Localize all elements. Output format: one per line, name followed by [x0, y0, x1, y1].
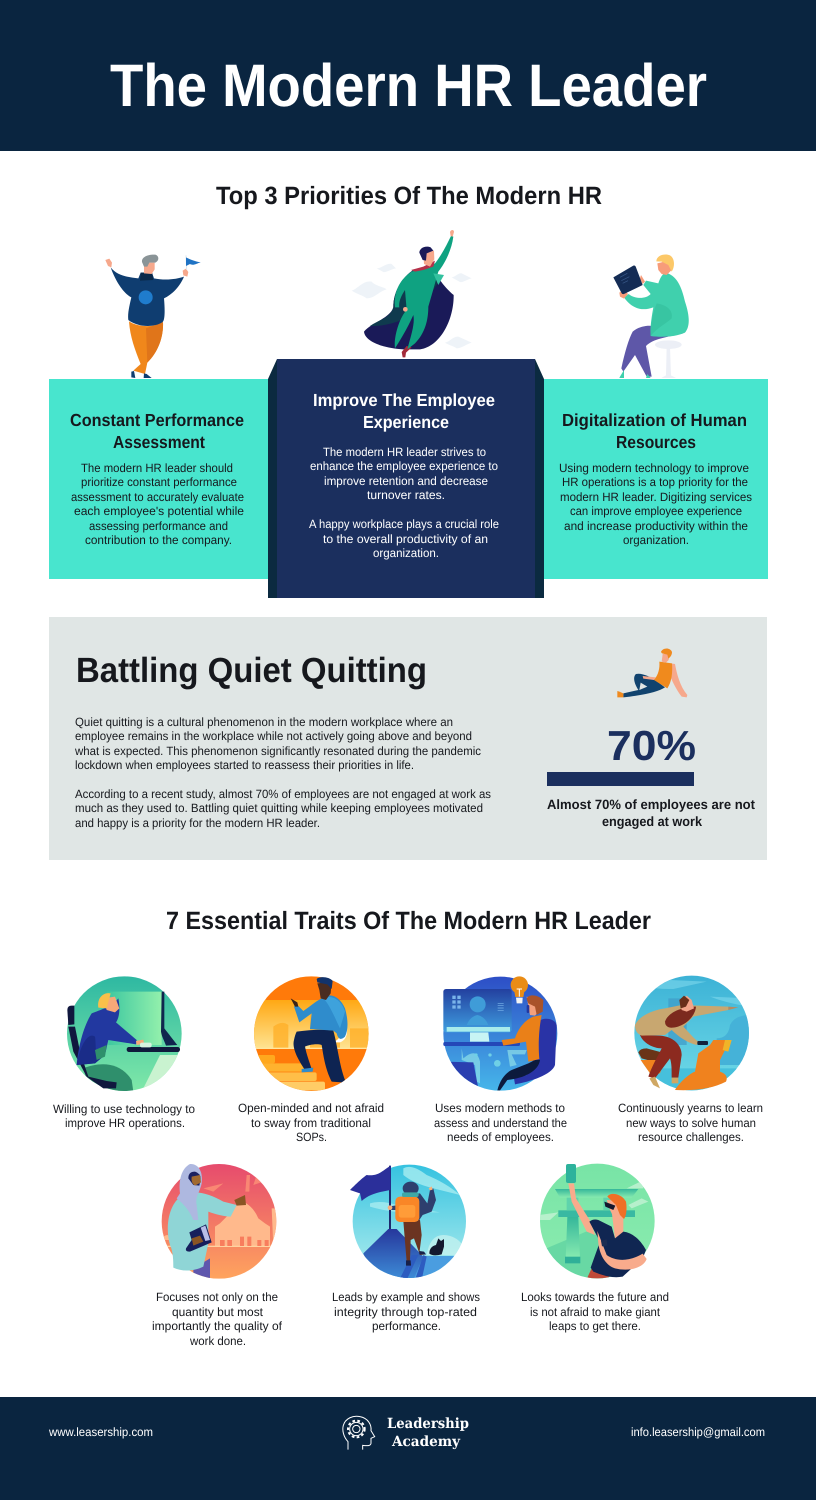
body text: employee remains in the workplace while not actively going above and beyond	[75, 729, 472, 743]
panel heading: Experience	[363, 412, 449, 432]
caption: to sway from traditional	[251, 1116, 371, 1130]
stat caption: engaged at work	[602, 814, 702, 829]
icon: head with gear	[343, 1416, 375, 1450]
caption: Looks towards the future and	[521, 1290, 669, 1304]
icon: woman with book and palace	[160, 1164, 280, 1279]
heading: Battling Quiet Quitting	[76, 651, 427, 690]
logo text	[387, 1416, 469, 1450]
panel text: modern HR leader. Digitizing services	[560, 490, 752, 504]
icon: analyst at monitor	[443, 976, 557, 1091]
panel text: organization.	[373, 546, 439, 560]
panel text: contribution to the company.	[85, 533, 232, 547]
panel text	[71, 461, 244, 547]
body text: and happy is a priority for the modern HR leader.	[75, 816, 320, 830]
caption: Willing to use technology to	[53, 1102, 195, 1116]
heading: top 3 priorities: Top 3 Priorities Of The Modern HR	[216, 182, 602, 210]
header band	[0, 0, 816, 151]
panel text: assessing performance and	[89, 519, 228, 533]
caption	[53, 1102, 195, 1130]
panel text: A happy workplace plays a crucial role	[309, 517, 499, 531]
icon: selfie at torii gate	[538, 1164, 655, 1279]
logo text: Leadership	[387, 1416, 469, 1432]
caption: integrity through top-rated	[334, 1305, 477, 1319]
panel text: turnover rates.	[367, 488, 445, 502]
caption: new ways to solve human	[626, 1116, 756, 1130]
panel text: to the overall productivity of an	[323, 532, 488, 546]
caption: Open-minded and not afraid	[238, 1101, 384, 1115]
trait 7	[521, 1164, 669, 1333]
caption: leaps to get there.	[549, 1319, 641, 1333]
caption: performance.	[372, 1319, 441, 1333]
caption: is not afraid to make giant	[530, 1305, 661, 1319]
panel: battling quiet quitting	[49, 617, 767, 860]
caption	[238, 1101, 384, 1144]
panel text: prioritize constant performance	[81, 475, 237, 489]
trait 6	[332, 1165, 480, 1333]
caption: Uses modern methods to	[435, 1101, 565, 1115]
caption: needs of employees.	[447, 1130, 554, 1144]
panel heading	[70, 410, 244, 452]
icon: bearded man on scooter	[633, 976, 750, 1092]
panel text: The modern HR leader should	[81, 461, 233, 475]
icon: hiker with flag on summit	[350, 1165, 468, 1282]
body text	[74, 715, 491, 830]
trait 2	[238, 976, 384, 1144]
body text: lockdown when employees started to reassess their priorities in life.	[75, 758, 414, 772]
title: The Modern HR Leader	[110, 52, 707, 119]
trait 5	[152, 1164, 283, 1348]
caption: Leads by example and shows	[332, 1290, 480, 1304]
panel heading: Assessment	[113, 432, 205, 452]
caption: SOPs.	[296, 1130, 327, 1144]
panel heading: Resources	[616, 432, 696, 452]
heading: 7 essential traits: 7 Essential Traits Of The Modern HR Leader	[166, 907, 651, 935]
illustration: person with tablet on stool	[613, 255, 689, 378]
stat caption: Almost 70% of employees are not	[547, 797, 755, 812]
panel text	[559, 461, 752, 547]
panel heading: Constant Performance	[70, 410, 244, 430]
panel heading: Improve The Employee	[313, 390, 495, 410]
panel text: assessment to accurately evaluate	[71, 490, 244, 504]
stat: 70%: 70%	[607, 722, 696, 769]
caption	[521, 1290, 669, 1333]
body text: what is expected. This phenomenon significantly resonated during the pandemic	[74, 744, 481, 758]
trait 1	[53, 976, 195, 1130]
panel: digitalization of human resources	[538, 379, 768, 579]
panel text: enhance the employee experience to	[310, 459, 498, 473]
trait 3	[434, 976, 567, 1144]
caption	[332, 1290, 480, 1333]
email: info.leasership@gmail.com	[631, 1425, 765, 1439]
panel text: HR operations is a top priority for the	[562, 475, 748, 489]
caption: work done.	[189, 1334, 246, 1348]
panel heading: Digitalization of Human	[562, 410, 747, 430]
caption	[434, 1101, 567, 1144]
panel text: and increase productivity within the	[564, 519, 748, 533]
body text: much as they used to. Battling quiet quitting while keeping employees motivated	[75, 801, 483, 815]
illustration: seated person	[617, 648, 687, 697]
footer	[0, 1397, 816, 1500]
caption: improve HR operations.	[65, 1116, 185, 1130]
panel text	[309, 445, 499, 560]
caption: Focuses not only on the	[156, 1290, 278, 1304]
panel: constant performance assessment	[49, 379, 274, 579]
panel text: improve retention and decrease	[324, 474, 488, 488]
website: www.leasership.com	[48, 1425, 153, 1439]
panel text: Using modern technology to improve	[559, 461, 749, 475]
panel heading	[313, 390, 495, 432]
illustration: caped hero	[352, 230, 472, 357]
caption: importantly the quality of	[152, 1319, 283, 1333]
panel text: can improve employee experience	[570, 504, 742, 518]
stat caption	[547, 797, 755, 829]
icon: person at computer	[67, 976, 182, 1092]
panel text: each employee's potential while	[74, 504, 244, 518]
caption: quantity but most	[172, 1305, 264, 1319]
panel text: organization.	[623, 533, 689, 547]
panel text: The modern HR leader strives to	[323, 445, 486, 459]
caption	[152, 1290, 283, 1348]
caption: assess and understand the	[434, 1116, 567, 1130]
panel: improve the employee experience	[268, 359, 544, 598]
logo text: Academy	[391, 1434, 461, 1450]
illustration: man with flag	[105, 255, 201, 378]
caption	[618, 1101, 763, 1144]
trait 4	[618, 976, 763, 1144]
body text: According to a recent study, almost 70% of employees are not engaged at work as	[75, 787, 491, 801]
progress bar	[547, 772, 694, 786]
caption: resource challenges.	[638, 1130, 744, 1144]
panel heading	[562, 410, 747, 452]
body text: Quiet quitting is a cultural phenomenon in the modern workplace where an	[75, 715, 453, 729]
caption: Continuously yearns to learn	[618, 1101, 763, 1115]
icon: man climbing steps	[253, 976, 370, 1091]
